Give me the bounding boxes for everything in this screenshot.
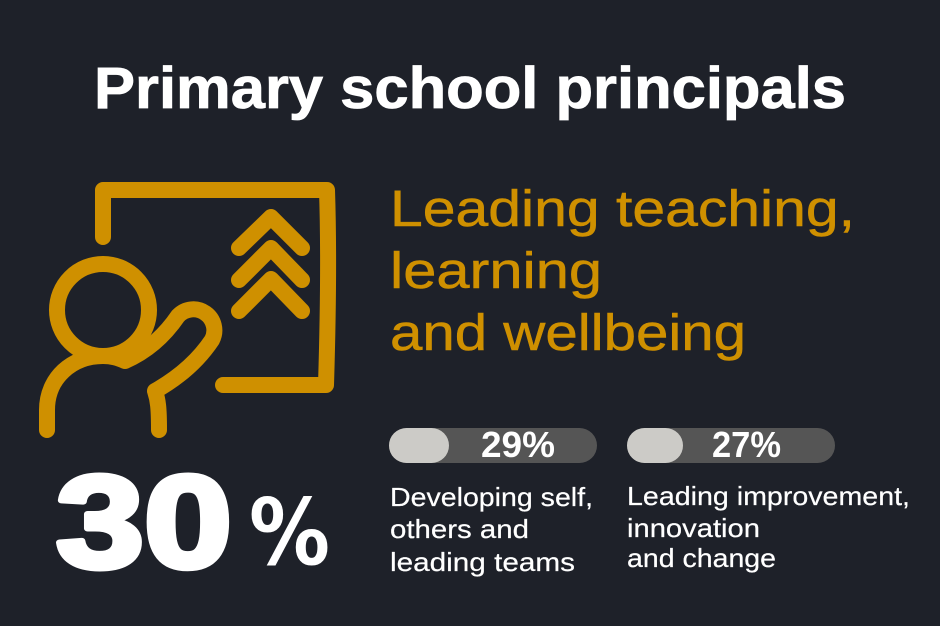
big percentage: 30% (56, 448, 330, 595)
big percentage: 30%: 30 (56, 448, 232, 595)
icon: teacher pointing at board with upward chevrons (47, 190, 328, 430)
heading: leading teaching, learning and wellbeing: learning (390, 242, 602, 299)
title: Primary school principals (94, 56, 846, 121)
label: developing self, others and leading teams: leading teams (390, 547, 575, 577)
label: developing self, others and leading teams: others and (390, 514, 529, 544)
icon: body and raised arm (47, 309, 214, 430)
progress bar: 29%: 29% (481, 424, 555, 465)
label: leading improvement, innovation and change (627, 481, 910, 573)
progress bar: 27% (627, 424, 835, 465)
label: leading improvement, innovation and change: Leading improvement, (627, 481, 910, 511)
progress bar: 27%: 27% (712, 424, 781, 465)
label: leading improvement, innovation and change: and change (627, 543, 776, 573)
icon: upward chevrons (239, 217, 302, 311)
icon: presentation board (103, 190, 328, 385)
progress bar: 29% (389, 424, 597, 465)
icon: head (57, 264, 149, 356)
heading: leading teaching, learning and wellbeing: Leading teaching, (390, 180, 855, 237)
heading: leading teaching, learning and wellbeing: and wellbeing (390, 304, 746, 361)
label: leading improvement, innovation and change: innovation (627, 513, 760, 543)
label: developing self, others and leading teams (390, 482, 593, 577)
heading: leading teaching, learning and wellbeing (390, 180, 855, 361)
big percentage: 30%: % (249, 479, 330, 586)
label: developing self, others and leading teams: Developing self, (390, 482, 593, 512)
